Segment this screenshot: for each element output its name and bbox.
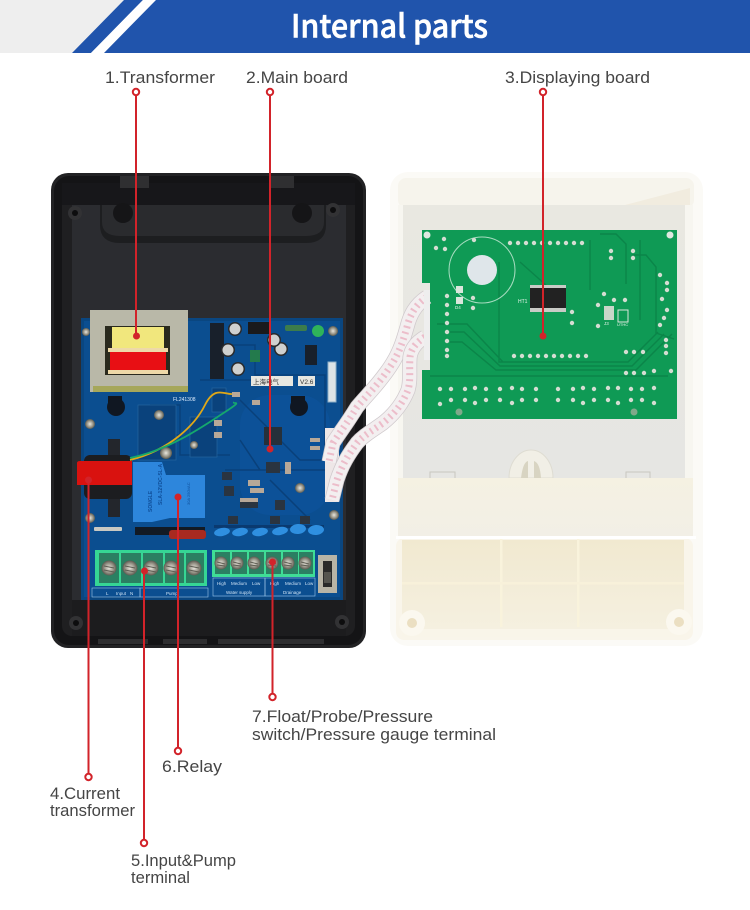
callout: 3.Displaying board	[505, 68, 650, 340]
wire connector	[325, 428, 339, 502]
terminal silkscreen labels: Low	[252, 581, 261, 586]
axial resistors	[94, 527, 206, 539]
callout: 2.Main board: 2.Main board	[246, 68, 348, 87]
black housing	[51, 173, 366, 648]
terminal silkscreen labels: N	[130, 591, 133, 596]
callout: 6.Relay	[162, 494, 223, 776]
displaying board PCB: UTHC	[617, 322, 628, 327]
transformer	[90, 310, 188, 392]
latch	[509, 450, 553, 478]
blue capacitors row	[213, 523, 324, 537]
main board PCB	[77, 310, 343, 600]
callout: 5.Input and Pump terminal	[131, 568, 236, 887]
board standoffs	[82, 326, 339, 523]
mounting hole and silk ring	[449, 237, 515, 303]
terminal silkscreen labels: Low	[305, 581, 314, 586]
slide switch	[318, 555, 337, 593]
relay: 30A 250VAC	[186, 482, 191, 505]
white housing	[390, 172, 703, 646]
relay: SONGLE	[148, 490, 154, 512]
callout: 5.Input and Pump terminal: terminal	[131, 868, 190, 887]
callout: 7.Float/Probe/Pressure terminal	[252, 558, 496, 744]
header banner	[0, 0, 750, 53]
terminal silkscreen labels: Input	[116, 591, 127, 596]
terminal silkscreen labels: Medium	[231, 581, 247, 586]
callout: 1.Transformer: 1.Transformer	[105, 68, 215, 87]
driver chip	[530, 285, 566, 312]
microcontroller	[264, 427, 282, 445]
terminal silkscreen labels: High	[217, 581, 227, 586]
terminal silkscreen labels: Pump	[166, 591, 178, 596]
input and pump terminal block	[95, 550, 207, 586]
callout: 5.Input and Pump terminal: 5.Input&Pump	[131, 851, 236, 870]
relay	[133, 462, 205, 522]
callout: 2.Main board	[246, 68, 348, 452]
board model label	[251, 376, 315, 386]
callout: 4.Current transformer: transformer	[50, 801, 135, 820]
displaying board PCB: HT1	[518, 299, 528, 305]
board model label: 上海电气	[253, 376, 280, 386]
displaying board PCB: J3	[604, 321, 609, 326]
connector pins	[328, 362, 336, 402]
terminal silkscreen labels: Drainage	[283, 590, 302, 595]
ribbon cables	[329, 290, 427, 500]
electrolytic capacitors	[210, 322, 317, 379]
terminal silkscreen labels: Medium	[285, 581, 301, 586]
terminal silkscreen labels: L	[106, 591, 109, 596]
battery-box compartment	[396, 536, 696, 640]
callout: 7.Float/Probe/Pressure terminal: 7.Float/Probe/Pressure	[252, 707, 433, 726]
callout: 1.Transformer	[105, 68, 215, 340]
callout: 4.Current transformer: 4.Current	[50, 784, 120, 803]
main board PCB: FL241308	[173, 397, 196, 403]
callout: 7.Float/Probe/Pressure terminal: switch/Pressure gauge terminal	[252, 725, 496, 744]
indicator LED and resistor	[285, 325, 324, 337]
board model label: V2.6	[300, 379, 314, 386]
solder pads	[434, 237, 673, 406]
terminal silkscreen labels: High	[270, 581, 280, 586]
displaying board PCB	[422, 230, 677, 419]
signal wires	[130, 392, 236, 460]
title: Internal parts	[291, 2, 488, 48]
callout: 3.Displaying board: 3.Displaying board	[505, 68, 650, 87]
terminal silkscreen labels: Water supply	[226, 590, 253, 595]
relay: SLA-12VDC-SL-A	[158, 463, 164, 505]
sensor terminal block	[212, 550, 315, 577]
callout: 6.Relay: 6.Relay	[162, 757, 223, 776]
displaying board PCB: D4	[455, 305, 461, 310]
small SMD components	[214, 462, 324, 528]
callout: 4.Current transformer	[50, 476, 135, 820]
terminal silkscreen labels	[92, 578, 315, 597]
current transformer	[77, 439, 132, 517]
